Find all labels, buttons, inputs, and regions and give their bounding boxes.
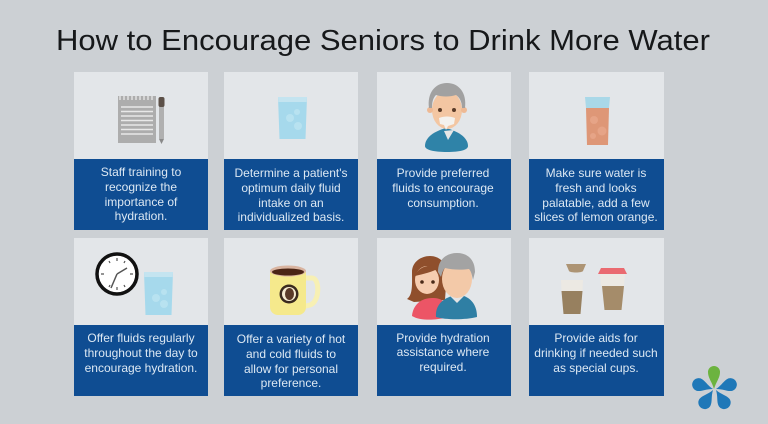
- text: regular fluids: Offer fluids regularly: [87, 331, 195, 345]
- text: hot and cold fluids: and cold fluids to: [246, 347, 336, 361]
- text: daily intake: individualized basis.: [238, 210, 344, 224]
- icon: caregiver and senior: [407, 253, 477, 320]
- icon: coffee mug: [270, 266, 318, 315]
- text: staff training: hydration.: [115, 209, 167, 223]
- icon: special cups: [561, 264, 627, 314]
- icon: glass with fruit drink: [585, 97, 610, 145]
- text: daily intake: intake on an: [258, 196, 324, 210]
- text: daily intake: optimum daily fluid: [241, 181, 341, 195]
- text: regular fluids: throughout the day to: [84, 346, 198, 360]
- panel: preferred fluids: [377, 72, 511, 230]
- text: hydration assistance: assistance where: [397, 345, 490, 359]
- panel: regular fluids: [74, 238, 208, 396]
- text: daily intake: Determine a patient's: [234, 166, 348, 180]
- text: hot and cold fluids: Offer a variety of hot: [237, 332, 346, 346]
- text: hot and cold fluids: preference.: [261, 376, 321, 390]
- text: drinking aids: as special cups.: [553, 361, 639, 375]
- text: fresh water: fresh and looks: [555, 181, 637, 195]
- text: preferred fluids: Provide preferred: [397, 166, 489, 180]
- icon: clock: [97, 254, 137, 294]
- panel: staff training: [74, 72, 208, 230]
- text: hydration assistance: Provide hydration: [396, 331, 490, 345]
- panel: fresh water: [529, 72, 664, 230]
- panel: daily intake: [224, 72, 358, 230]
- icon: senior man drinking: [425, 83, 468, 152]
- text: fresh water: palatable, add a few: [542, 196, 650, 210]
- title: How to Encourage Seniors to Drink More Water: [56, 25, 710, 57]
- text: hydration assistance: required.: [419, 360, 467, 374]
- panel: hot and cold fluids: [224, 238, 358, 396]
- text: drinking aids: Provide aids for: [554, 331, 638, 345]
- text: staff training: Staff training to: [101, 165, 182, 179]
- text: staff training: importance of: [105, 195, 178, 209]
- icon: logo: [691, 366, 738, 412]
- text: preferred fluids: fluids to encourage: [392, 181, 494, 195]
- text: staff training: recognize the: [105, 180, 177, 194]
- panel: drinking aids: [529, 238, 664, 396]
- icon: glass of water: [144, 272, 173, 315]
- text: regular fluids: encourage hydration.: [85, 361, 197, 375]
- text: fresh water: slices of lemon orange.: [534, 210, 658, 224]
- icon: glass of water: [278, 97, 307, 139]
- text: hot and cold fluids: allow for personal: [244, 362, 338, 376]
- panel: hydration assistance: [377, 238, 511, 396]
- text: fresh water: Make sure water is: [546, 166, 646, 180]
- text: drinking aids: drinking if needed such: [534, 346, 658, 360]
- icon: notepad and pen: [118, 96, 164, 144]
- text: preferred fluids: consumption.: [407, 196, 479, 210]
